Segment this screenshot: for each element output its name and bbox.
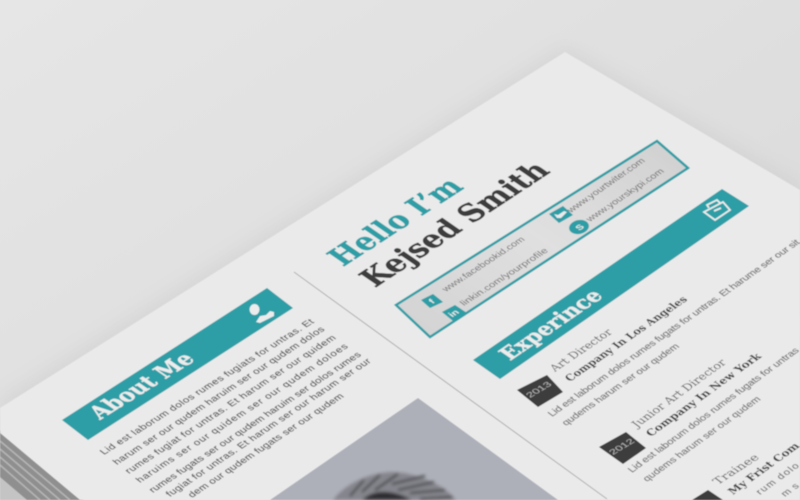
contact box	[396, 141, 688, 337]
icon: briefcase	[704, 200, 730, 220]
job 1: qudems harum ser our qudem	[560, 342, 682, 428]
about me text: harum ser our qudem haruim ser our qudem dolos	[111, 325, 328, 467]
icon: twitter	[549, 206, 573, 223]
sheet divider line	[294, 272, 607, 499]
heading: Experince: Experince	[493, 285, 608, 364]
contact: skype: www.yourskypi.com	[583, 167, 667, 224]
heading: Hello I'm: Hello I’m	[319, 171, 471, 271]
year badge 2012	[599, 432, 646, 464]
job title: Junior Art Director	[627, 356, 730, 430]
about me text: dem our qudem fugats ser our qudem	[186, 392, 347, 500]
icon: linkedin	[442, 305, 467, 321]
description: Lid est laborum dolos rumes fugats for untras	[626, 346, 800, 475]
contact: twitter: www.yourtwiter.com	[564, 157, 648, 215]
contact: linkedin: linkin.com/yourprofile	[458, 246, 552, 308]
icon: facebook	[421, 294, 443, 308]
about me banner	[62, 288, 293, 440]
year badge	[692, 490, 723, 500]
photo	[270, 398, 558, 500]
job title: Art Director	[545, 326, 616, 374]
icon: facebook: f	[427, 297, 438, 305]
icon: person	[250, 304, 274, 323]
about me text: rumes fugiat for untras. Et harum ser our quidem	[123, 334, 339, 476]
about me text	[98, 318, 375, 500]
paper stack side	[0, 430, 84, 500]
portrait hair	[333, 472, 456, 500]
company: Company In Los Angeles	[562, 294, 690, 384]
icon: linkedin: in	[446, 308, 462, 318]
job 1	[517, 238, 800, 428]
job 2: qudems harum ser our qudem	[641, 395, 763, 484]
contact: facebook: www.facebookid.com	[439, 235, 528, 294]
heading: Kejsed Smith: Kejsed Smith	[351, 155, 557, 292]
icon: skype	[568, 218, 590, 236]
job 3	[692, 440, 800, 500]
company: Company In New York	[643, 351, 765, 439]
panel: experience	[473, 189, 800, 500]
experience banner	[473, 189, 749, 379]
description: Lid est laborum dolos rumes fugats for untras. Et harume ser our sit	[546, 238, 800, 419]
about me text: fugiat for untras. Et harum ser our harum ser our	[164, 357, 375, 499]
about me text: haruims ser our quidem ser our qudem doloes	[134, 342, 351, 485]
job title: Trainee	[709, 451, 763, 487]
panel: about me	[62, 288, 375, 500]
heading: About Me: About Me	[82, 348, 201, 424]
job 1: 2013	[524, 380, 555, 400]
about me text: Lid est laborum dolos rumes fugiats for untras. Et	[98, 318, 317, 457]
job 2: 2012	[607, 437, 638, 457]
job 2	[599, 346, 800, 484]
about me text: rumes fugats ser our qudem haruim ser dolos rumes	[147, 351, 364, 495]
icon: skype: S	[573, 223, 586, 232]
year badge 2013	[517, 375, 563, 407]
